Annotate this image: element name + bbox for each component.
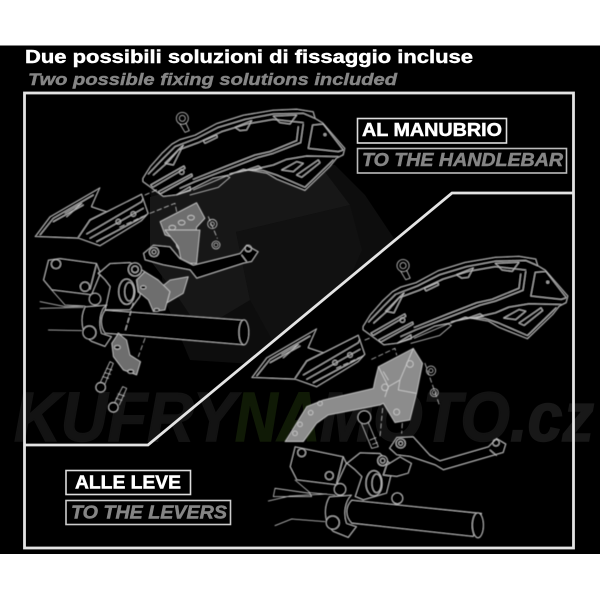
panel: handlebar mounting diagram bbox=[35, 109, 345, 412]
panel: lever mounting diagram bbox=[252, 256, 568, 538]
label: al manubrio: AL MANUBRIO bbox=[362, 120, 502, 140]
handguard exploded bbox=[363, 256, 568, 345]
label: al manubrio bbox=[358, 118, 506, 143]
extension bracket bbox=[285, 337, 440, 448]
lever and handlebar assembly bbox=[40, 230, 258, 412]
lever and handlebar assembly bbox=[268, 437, 506, 538]
long bolt bbox=[358, 411, 371, 424]
watermark: KUFRYNAMOTO.cz: KUFRY bbox=[14, 378, 241, 456]
watermark silhouette bbox=[150, 165, 400, 365]
label: alle leve: ALLE LEVE bbox=[75, 472, 181, 492]
watermark: KUFRYNAMOTO.cz: NA bbox=[235, 378, 320, 456]
front insert bbox=[35, 188, 148, 246]
watermark: KUFRYNAMOTO.cz: MOTO bbox=[320, 378, 510, 456]
handguard exploded bbox=[143, 109, 345, 197]
label: to the handlebar: TO THE HANDLEBAR bbox=[362, 150, 563, 170]
front insert bbox=[252, 329, 365, 387]
label: alle leve bbox=[66, 470, 190, 494]
subtitle: Two possible fixing solutions included bbox=[28, 70, 398, 89]
label: to the levers: TO THE LEVERS bbox=[71, 502, 227, 522]
title: Due possibili soluzioni di fissaggio incluse bbox=[25, 47, 473, 67]
bracket and nuts bbox=[145, 190, 220, 260]
watermark: KUFRYNAMOTO.cz bbox=[14, 378, 594, 456]
frame with diagonal divider bbox=[24, 93, 574, 548]
